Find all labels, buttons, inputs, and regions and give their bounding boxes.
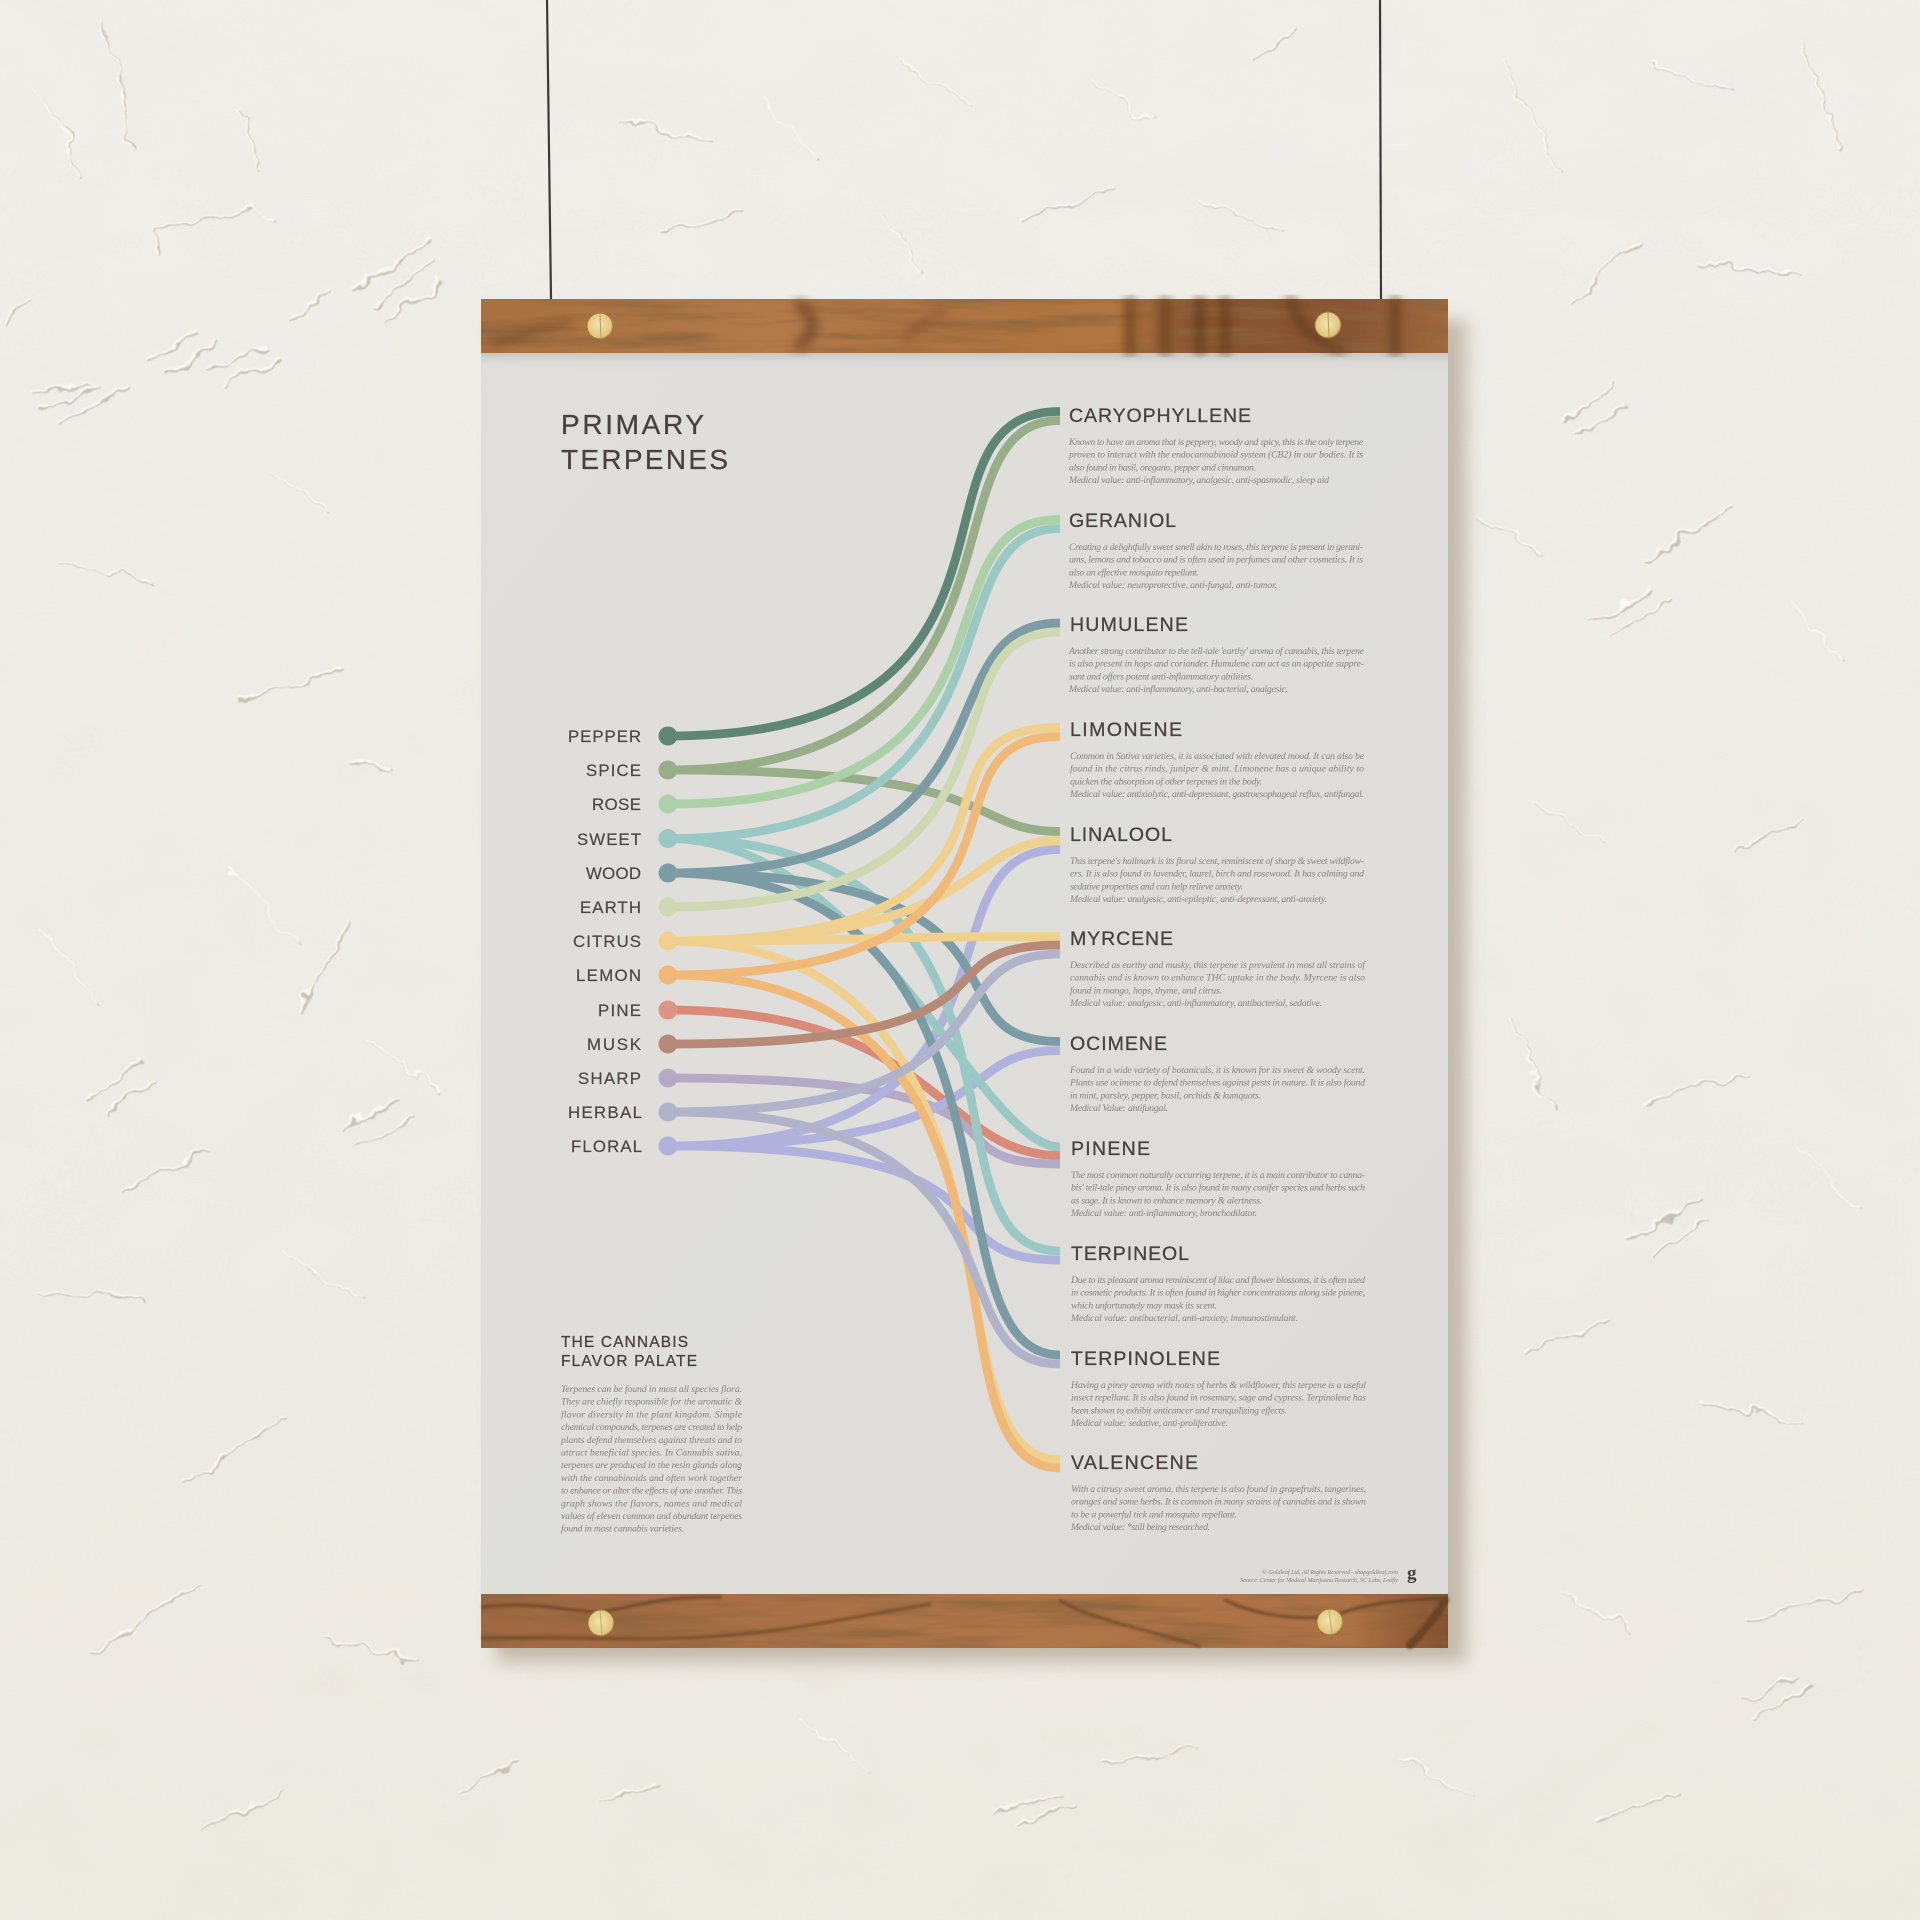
terpene: ocimene: Medical Value: antifungal.	[1069, 1103, 1168, 1114]
terpene: limonene	[1069, 719, 1365, 800]
subtitle: the cannabis flavor palate	[561, 1334, 697, 1370]
terpene: valencene: Medical value: *still being researched.	[1070, 1522, 1210, 1533]
terpene: terpineol: Due to its pleasant aroma reminiscent of lilac and flower blossoms, it is often used	[1070, 1275, 1365, 1286]
terpene: valencene: oranges and some herbs. It is common in many strains of cannabis and is shown	[1071, 1497, 1366, 1508]
terpene: terpinolene: insect repellant. It is also found in rosemary, sage and cypress. Terpinolene has	[1071, 1393, 1366, 1404]
terpene: ocimene	[1069, 1033, 1365, 1114]
terpene: limonene: Common in Sativa varieties, it is associated with elevated mood. It can also be	[1070, 751, 1365, 762]
terpene: terpinolene	[1070, 1348, 1366, 1429]
terpene: terpineol: TERPINEOL	[1071, 1243, 1189, 1265]
terpene: myrcene: Described as earthy and musky, this terpene is prevalent in most all strains of	[1069, 960, 1366, 971]
flow: sharp	[658, 1068, 1060, 1164]
flow: rose	[658, 520, 1060, 814]
intro paragraph: to enhance or alter the effects of one another. This	[561, 1486, 742, 1497]
terpene: geraniol: also an effective mosquito repellant.	[1069, 567, 1199, 578]
terpene: humulene: Another strong contributor to the tell-tale 'earthy' aroma of cannabis, this terpene	[1068, 646, 1365, 657]
terpene: ocimene: Plants use ocimene to defend themselves against pests in nature. It is also found	[1069, 1078, 1365, 1089]
top wooden bar	[481, 299, 1448, 353]
flavor labels: SWEET	[577, 830, 641, 849]
terpene: myrcene: found in mango, hops, thyme, and citrus.	[1070, 985, 1222, 996]
terpene: humulene: Medical value: anti-inflammatory, anti-bacterial, analgesic.	[1068, 684, 1288, 695]
terpene: terpineol: in cosmetic products. It is often found in higher concentrations along side pinene,	[1071, 1288, 1365, 1299]
terpene: caryophyllene: Known to have an aroma that is peppery, woody and spicy, this is the only terpene	[1068, 437, 1364, 448]
flow: herbal	[658, 954, 1060, 1364]
title: TERPENES	[561, 444, 728, 475]
terpene: pinene: bis' tell-tale piney aroma. It is also found in many conifer species and herbs such	[1071, 1183, 1365, 1194]
intro paragraph: terpenes are produced in the resin glands along	[561, 1460, 742, 1471]
brass screw lower left	[588, 1610, 614, 1636]
terpene: limonene: quicken the absorption of other terpenes in the body.	[1070, 776, 1262, 787]
intro paragraph: attract beneficial species. In Cannabis sativa,	[561, 1448, 742, 1458]
intro paragraph	[560, 1384, 743, 1535]
intro paragraph: Terpenes can be found in most all species flora.	[561, 1384, 742, 1395]
terpene: geraniol: GERANIOL	[1069, 510, 1176, 532]
flavor labels: PINE	[598, 1001, 641, 1020]
terpene: terpineol: which unfortunately may mask its scent.	[1071, 1300, 1217, 1311]
terpene: linalool: Medical value: analgesic, anti-epileptic, anti-depressant, anti-anxiety.	[1069, 894, 1327, 905]
flow: pine	[658, 1000, 1060, 1156]
flavor-to-terpene flow chart	[658, 412, 1060, 1468]
subtitle: the cannabis flavor palate: FLAVOR PALATE	[561, 1353, 697, 1370]
terpene: myrcene: Medical value: analgesic, anti-inflammatory, antibacterial, sedative.	[1069, 998, 1322, 1009]
terpene: terpinolene: been shown to exhibit anticancer and tranquilizing effects.	[1071, 1405, 1287, 1416]
terpene: terpinolene: Having a piney aroma with notes of herbs & wildflower, this terpene is a useful	[1070, 1380, 1366, 1391]
flavor labels: PEPPER	[568, 727, 641, 746]
terpene: geraniol	[1068, 510, 1363, 591]
flavor labels: MUSK	[587, 1035, 641, 1054]
terpene: linalool: LINALOOL	[1070, 824, 1172, 846]
cast shadow of the poster	[496, 320, 1466, 1662]
flavor labels: LEMON	[576, 966, 641, 985]
footer credits: Source: Center for Medical Marijuana Research, SC Labs, Leafly	[1240, 1577, 1398, 1584]
title: PRIMARY	[561, 409, 704, 440]
terpene: pinene	[1070, 1138, 1365, 1219]
flavor labels: HERBAL	[568, 1103, 642, 1122]
intro paragraph: values of eleven common and abundant terpenes	[561, 1511, 742, 1522]
intro paragraph: They are chiefly responsible for the aromatic &	[561, 1397, 742, 1408]
terpene: pinene: Medical value: anti-inflammatory, bronchodilator.	[1070, 1208, 1257, 1219]
terpene: ocimene: Found in a wide variety of botanicals, it is known for its sweet & woody scent.	[1069, 1065, 1365, 1076]
terpene: terpinolene: TERPINOLENE	[1071, 1348, 1220, 1370]
terpene: pinene: The most common naturally occurring terpene, it is a main contributor to canna-	[1071, 1170, 1365, 1181]
terpene: ocimene: OCIMENE	[1070, 1033, 1167, 1055]
flow: citrus	[658, 728, 1060, 1460]
terpene: geraniol: ums, lemons and tobacco and is often used in perfumes and other cosmetics. It is	[1069, 555, 1363, 566]
terpene: geraniol: Medical value: neuroprotective, anti-fungal, anti-tumor.	[1068, 580, 1277, 591]
terpene: pinene: as sage. It is known to enhance memory & alertness.	[1071, 1195, 1262, 1206]
footer credits	[1240, 1569, 1398, 1584]
flow: wood	[658, 623, 1060, 1355]
terpene: valencene: VALENCENE	[1071, 1452, 1198, 1474]
flavor labels: WOOD	[586, 864, 641, 883]
flow: spice	[658, 420, 1060, 832]
intro paragraph: flavor diversity in the plant kingdom. Simple	[561, 1409, 743, 1420]
flow: sweet	[658, 528, 1060, 1251]
terpene: ocimene: in mint, parsley, pepper, basil, orchids & kumquats.	[1070, 1090, 1261, 1101]
poster paper	[481, 353, 1448, 1595]
brass screw right	[1315, 312, 1341, 338]
flavor labels: ROSE	[592, 795, 641, 814]
flavor labels: CITRUS	[573, 932, 641, 951]
terpene: humulene: is also present in hops and coriander. Humulene can act as an appetite suppre-	[1069, 659, 1364, 670]
terpene: limonene: found in the citrus rinds, juniper & mint. Limonene has a unique ability to	[1070, 764, 1364, 775]
terpene: limonene: LIMONENE	[1070, 719, 1182, 741]
footer credits: © Goldleaf Ltd, All Rights Reserved - shopgoldleaf.com	[1262, 1569, 1398, 1576]
terpene: humulene: HUMULENE	[1070, 614, 1188, 636]
flow: earth	[658, 632, 1060, 916]
terpene: myrcene: cannabis and is known to enhance THC uptake in the body. Myrcene is also	[1070, 973, 1365, 984]
terpene: pinene: PINENE	[1071, 1138, 1150, 1160]
subtitle: the cannabis flavor palate: THE CANNABIS	[561, 1334, 688, 1351]
terpene: caryophyllene	[1068, 405, 1364, 486]
flavor labels: EARTH	[580, 898, 641, 917]
intro paragraph: with the cannabinoids and often work together	[561, 1473, 742, 1484]
terpene: valencene	[1070, 1452, 1366, 1533]
terpene: caryophyllene: also found in basil, oregano, pepper and cinnamon.	[1069, 462, 1256, 473]
brass screw left	[587, 313, 613, 339]
flavor labels: SPICE	[586, 761, 641, 780]
terpene: terpineol	[1070, 1243, 1365, 1324]
hanging cords	[547, 0, 1381, 299]
terpene: terpineol: Medical value: antibacterial, anti-anxiety, immunostimulant.	[1070, 1313, 1298, 1324]
logo mark: g	[1407, 1563, 1417, 1584]
intro paragraph: found in most cannabis varieties.	[561, 1524, 684, 1535]
terpene: caryophyllene: Medical value: anti-inflammatory, analgesic, anti-spasmodic, sleep aid	[1068, 475, 1329, 486]
terpene: terpinolene: Medical value: sedative, anti-proliferative.	[1070, 1418, 1228, 1429]
terpene: myrcene	[1069, 928, 1366, 1009]
intro paragraph: plants defend themselves against threats and to	[560, 1435, 742, 1446]
bottom wooden bar	[481, 1594, 1448, 1648]
terpene: linalool: ers. It is also found in lavender, laurel, birch and rosewood. It has calming and	[1070, 869, 1364, 880]
terpene: humulene: sant and offers potent anti-inflammatory abilities.	[1069, 671, 1253, 682]
flavor labels: SHARP	[578, 1069, 641, 1088]
flow: lemon	[658, 736, 1060, 1468]
terpene: humulene	[1068, 614, 1365, 695]
terpene: geraniol: Creating a delightfully sweet smell akin to roses, this terpene is present in gerani-	[1069, 542, 1363, 553]
title	[561, 409, 728, 475]
flavor labels: FLORAL	[571, 1137, 642, 1156]
terpene: linalool: sedative properties and can help relieve anxiety.	[1070, 881, 1243, 892]
flow: pepper	[658, 412, 1060, 746]
intro paragraph: graph shows the flavors, names and medical	[561, 1498, 742, 1509]
brass screw lower right	[1317, 1609, 1343, 1635]
terpene: limonene: Medical value: antixiolytic, anti-depressant, gastroesophageal reflux, antifungal.	[1069, 789, 1364, 800]
flow: musk	[658, 945, 1060, 1054]
terpene: valencene: to be a powerful tick and mosquito repellant.	[1071, 1509, 1237, 1520]
flavor labels	[568, 727, 642, 1156]
terpene: valencene: With a citrusy sweet aroma, this terpene is also found in grapefruits, tangerines,	[1071, 1484, 1366, 1495]
terpene: caryophyllene: proven to interact with the endocannabinoid system (CB2) in our bodies. It is	[1068, 450, 1363, 461]
terpene: linalool: This terpene's hallmark is its floral scent, reminiscent of sharp & sweet wildflow-	[1070, 856, 1364, 867]
terpene: linalool	[1069, 824, 1364, 905]
flow: floral	[658, 850, 1060, 1260]
intro paragraph: chemical compounds, terpenes are created to help	[561, 1422, 742, 1433]
terpene: myrcene: MYRCENE	[1070, 928, 1173, 950]
terpene: caryophyllene: CARYOPHYLLENE	[1069, 405, 1251, 427]
